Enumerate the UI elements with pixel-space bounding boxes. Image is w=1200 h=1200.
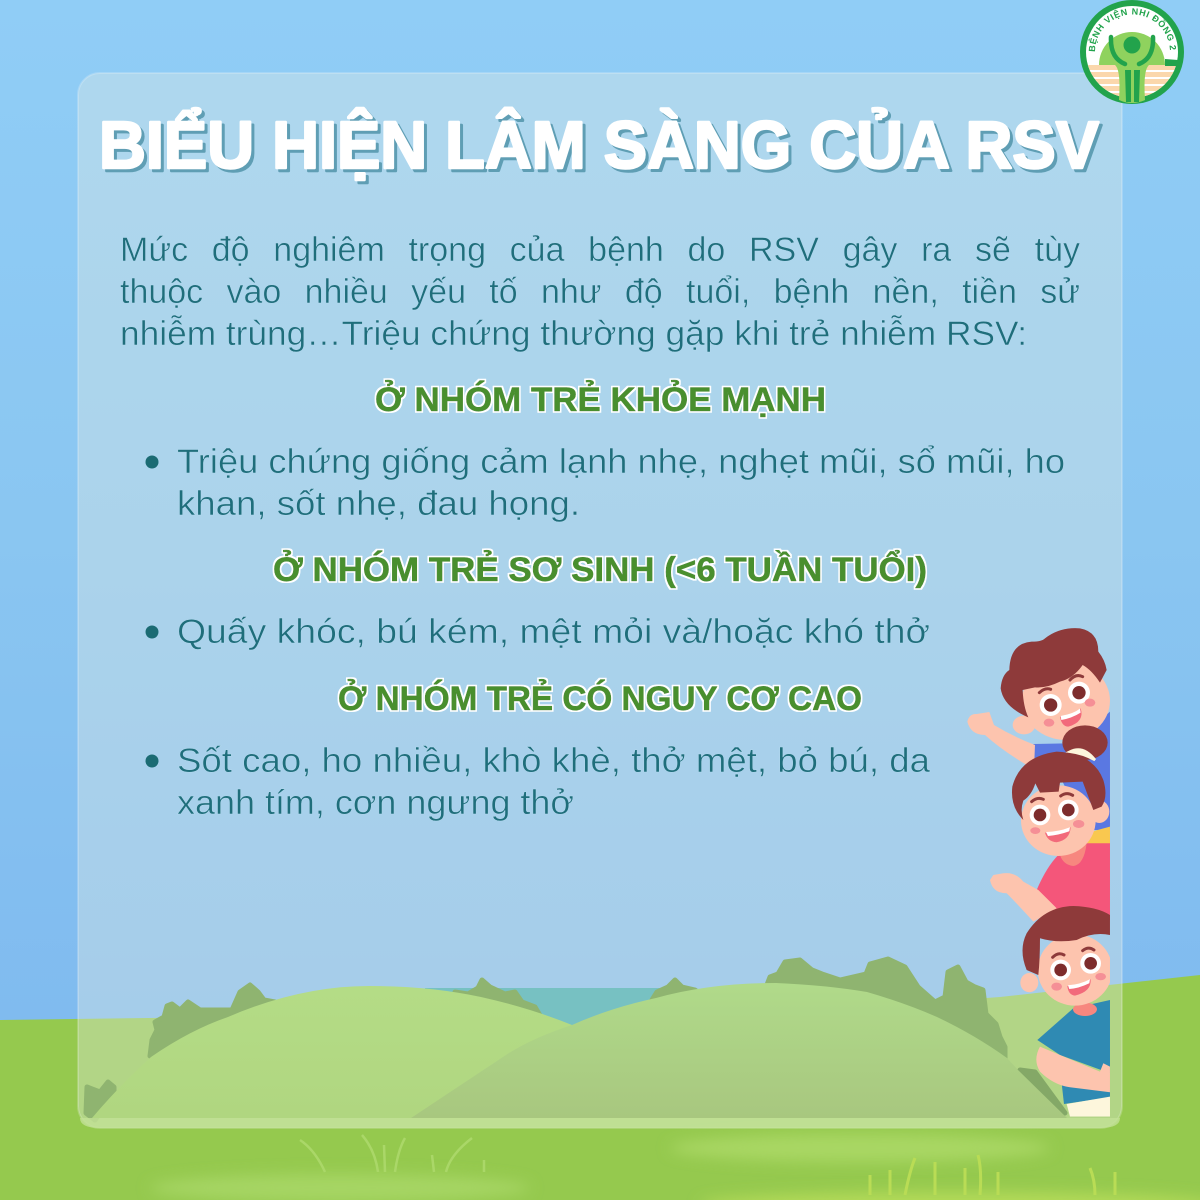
body text line 3: nhiễm trùng…Triệu chứng thường gặp khi trẻ nhiễm RSV: — [120, 315, 1027, 353]
panel bottom edge — [80, 1118, 1120, 1128]
body text line 2: thuộc vào nhiều yếu tố như độ tuổi, bệnh nền, tiền sử — [120, 273, 1080, 311]
bullet list: healthy children — [146, 443, 1065, 523]
bullet list: high risk children: Sốt cao, ho nhiều, khò khè, thở mệt, bỏ bú, da — [177, 742, 930, 780]
panel: frosted glass card — [78, 73, 1122, 1128]
background: bushes behind hills — [86, 959, 1065, 1120]
body text line 1: Mức độ nghiêm trọng của bệnh do RSV gây ra sẽ tùy — [120, 231, 1080, 269]
bullet list: high risk children — [146, 742, 930, 822]
child 3 — [1020, 906, 1112, 1117]
bullet list: healthy children: Triệu chứng giống cảm lạnh nhẹ, nghẹt mũi, sổ mũi, ho — [177, 443, 1065, 481]
logo figure — [1115, 65, 1149, 103]
child 1 — [967, 628, 1110, 830]
logo: Bệnh viện Nhi Đồng 2 — [1080, 0, 1184, 104]
background: grass field — [0, 975, 1200, 1200]
logo: Bệnh viện Nhi Đồng 2: BỆNH VIỆN NHI ĐỒNG 2 — [1088, 8, 1176, 52]
heading: high risk children: Ở NHÓM TRẺ CÓ NGUY CƠ CAO — [338, 680, 862, 718]
bullet list: high risk children: xanh tím, cơn ngưng thở — [177, 784, 574, 822]
heading: newborns: Ở NHÓM TRẺ SƠ SINH (<6 TUẦN TUỔI) — [273, 551, 927, 589]
title: BIỂU HIỆN LÂM SÀNG CỦA RSV — [99, 108, 1099, 183]
illustration: three children peeking — [967, 628, 1112, 1117]
hill: left — [92, 986, 640, 1118]
bullet list: newborns: Quấy khóc, bú kém, mệt mỏi và/hoặc khó thở — [177, 613, 930, 651]
bullet list: healthy children: khan, sốt nhẹ, đau họng. — [177, 485, 580, 523]
heading: healthy children: Ở NHÓM TRẺ KHỎE MẠNH — [375, 381, 826, 419]
hill: right — [411, 983, 1067, 1118]
sea — [425, 988, 665, 1038]
child 2 — [990, 725, 1110, 922]
